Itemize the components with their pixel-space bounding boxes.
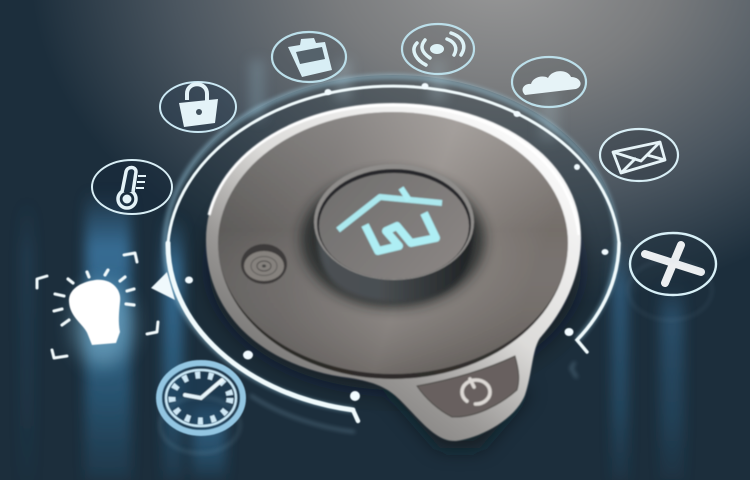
dial dark lower edge bbox=[218, 243, 568, 379]
dial rim and tab bbox=[206, 103, 581, 441]
icon ring: mail bbox=[600, 129, 678, 181]
bulb glass bbox=[69, 280, 120, 345]
ring glow bbox=[165, 76, 617, 410]
ring dots bbox=[185, 83, 608, 401]
icon ring: cloud bbox=[512, 57, 586, 107]
icon ring: lock bbox=[160, 82, 236, 132]
dial face bbox=[218, 112, 568, 374]
vertical light columns bbox=[20, 60, 684, 480]
icon ring: close cross bbox=[630, 233, 716, 295]
lit bulb icon bbox=[37, 253, 158, 367]
rim top highlight bbox=[209, 105, 579, 235]
icon ring: thermometer bbox=[92, 160, 172, 214]
center button bbox=[301, 164, 485, 308]
dim reflections bbox=[160, 260, 712, 453]
icon ring: wifi signal bbox=[402, 24, 474, 74]
power icon bbox=[462, 379, 490, 404]
dial shadow bbox=[209, 146, 581, 448]
dial body bbox=[206, 103, 581, 441]
power tab bbox=[417, 356, 519, 417]
focus brackets bbox=[37, 253, 158, 358]
speaker button bbox=[241, 244, 287, 284]
icon ring: battery bbox=[272, 32, 346, 82]
dark zone inside ring bbox=[167, 75, 619, 411]
selector triangle bbox=[151, 272, 175, 300]
home icon bbox=[338, 188, 442, 251]
outer glowing ring bbox=[168, 86, 619, 421]
icon ring: clock bbox=[159, 363, 243, 433]
bulb rays bbox=[54, 270, 134, 325]
